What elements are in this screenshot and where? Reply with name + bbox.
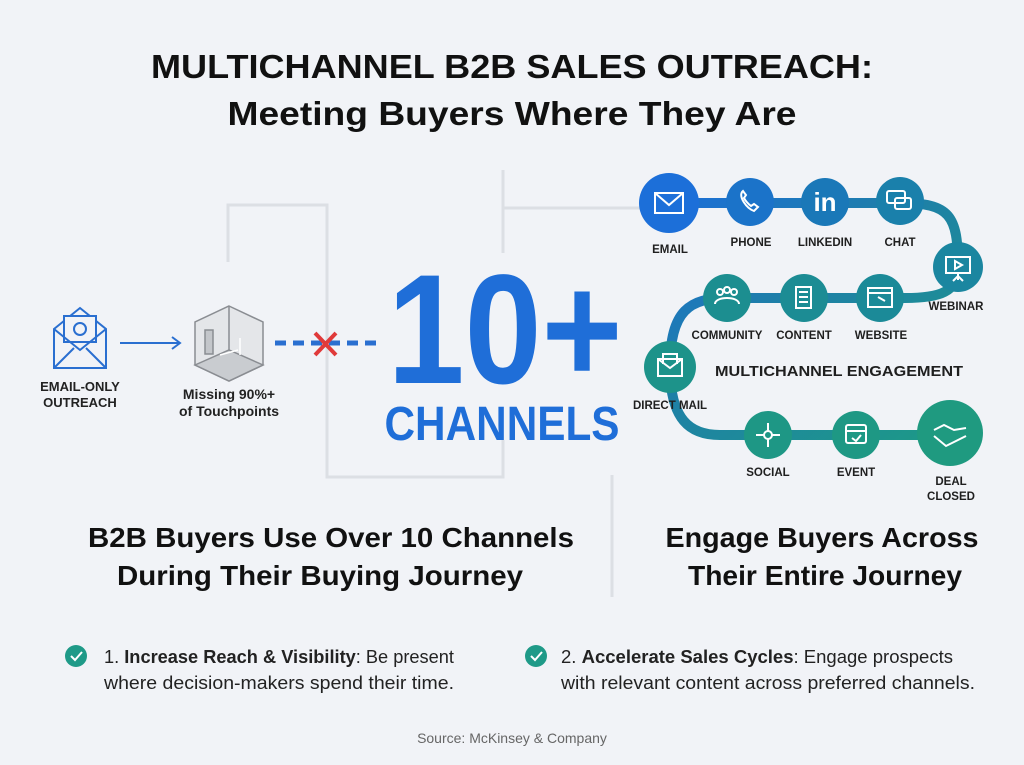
label: multichannel engagement: MULTICHANNEL ENGAGEMENT xyxy=(715,363,963,380)
channel labels: WEBSITE xyxy=(855,330,908,342)
channel icons xyxy=(655,191,970,447)
bullet 2: with relevant content across preferred channels. xyxy=(560,673,975,693)
icon: email-only outreach xyxy=(54,308,106,368)
channel labels: CONTENT xyxy=(776,330,832,342)
label: email-only outreach: EMAIL-ONLY xyxy=(40,379,120,394)
bullet 1: where decision-makers spend their time. xyxy=(103,673,454,693)
bullet 1 xyxy=(65,645,454,693)
bullet 2: 2. Accelerate Sales Cycles : Engage prospects xyxy=(561,647,953,667)
path connecting channels xyxy=(669,203,958,435)
channel labels: DEAL xyxy=(935,476,967,488)
heading right: Engage Buyers Across xyxy=(666,522,978,553)
channel labels: CHAT xyxy=(884,237,916,249)
label: email-only outreach: OUTREACH xyxy=(43,395,117,410)
arrow xyxy=(120,337,180,349)
channel labels: SOCIAL xyxy=(746,467,790,479)
channel labels: LINKEDIN xyxy=(798,237,852,249)
title: Meeting Buyers Where They Are xyxy=(228,95,796,132)
heading right xyxy=(666,522,978,591)
channel labels: EMAIL xyxy=(652,244,688,256)
channel labels: EVENT xyxy=(837,467,875,479)
channel labels xyxy=(633,237,984,503)
label: missing touchpoints xyxy=(179,386,279,419)
heading left: During Their Buying Journey xyxy=(117,560,523,591)
channel labels: PHONE xyxy=(731,237,772,249)
big stat 10+: 10+ xyxy=(388,243,622,417)
source: Source: McKinsey & Company xyxy=(417,730,607,746)
title xyxy=(151,48,873,132)
bullet 1: 1. Increase Reach & Visibility: Be present xyxy=(104,647,454,667)
channel labels: DIRECT MAIL xyxy=(633,400,707,412)
heading left xyxy=(88,522,574,591)
label: missing touchpoints: of Touchpoints xyxy=(179,403,279,419)
channel labels: COMMUNITY xyxy=(692,330,763,342)
heading right: Their Entire Journey xyxy=(688,560,962,591)
icon: empty room xyxy=(195,306,263,381)
text: in xyxy=(813,187,837,217)
channel labels: WEBINAR xyxy=(929,301,984,313)
heading left: B2B Buyers Use Over 10 Channels xyxy=(88,522,574,553)
channel labels: CLOSED xyxy=(927,491,975,503)
title: MULTICHANNEL B2B SALES OUTREACH: xyxy=(151,48,873,85)
big stat 10+: CHANNELS xyxy=(384,398,620,451)
dashed line with X xyxy=(275,333,378,355)
channel circles xyxy=(639,173,983,466)
label: missing touchpoints: Missing 90%+ xyxy=(183,386,275,402)
label: email-only outreach xyxy=(40,379,120,410)
bullet 2 xyxy=(525,645,975,693)
